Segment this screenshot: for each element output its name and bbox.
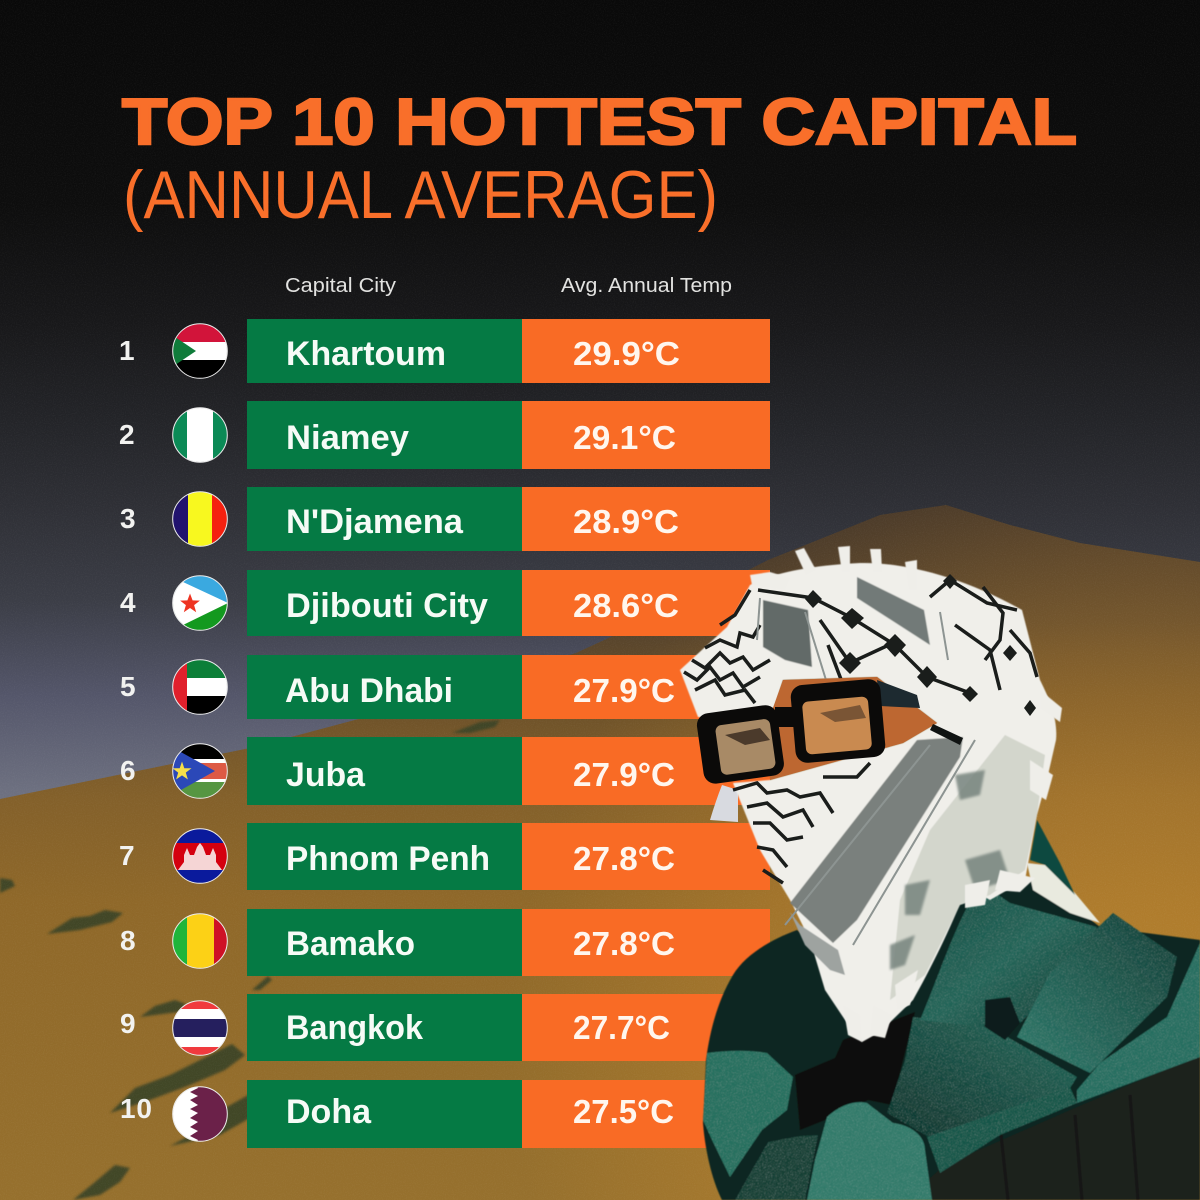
row 2: Niamey: 2 — [119, 419, 135, 450]
column headers — [285, 275, 732, 297]
title: (ANNUAL AVERAGE) — [123, 157, 718, 233]
row 10: Doha: Doha — [286, 1093, 372, 1131]
fringe tassels — [750, 546, 1062, 1042]
tassel left — [710, 785, 738, 822]
row 7: Phnom Penh — [119, 823, 770, 890]
row 9: Bangkok: 9 — [120, 1008, 136, 1039]
row 5: Abu Dhabi: 27.9°C — [573, 672, 675, 709]
keffiyeh pattern — [684, 580, 1037, 883]
row 10: Doha: 27.5°C — [573, 1093, 674, 1130]
row 5: Abu Dhabi: Abu Dhabi — [285, 672, 453, 710]
row 6: Juba: Juba — [286, 756, 366, 794]
row 6: Juba — [120, 737, 770, 805]
row 2: Niamey: Niamey — [286, 419, 409, 457]
row 9: Bangkok — [120, 994, 770, 1061]
row 4: Djibouti City: Djibouti City — [286, 587, 488, 625]
row 6: Juba: 6 — [120, 755, 136, 786]
title: TOP 10 HOTTEST CAPITAL — [122, 85, 1077, 158]
row 3: N'Djamena: 3 — [120, 503, 136, 534]
face skin — [765, 677, 937, 780]
row 10: Doha: 10 — [120, 1093, 152, 1124]
row 8: Bamako — [120, 909, 770, 976]
row 8: Bamako: 8 — [120, 925, 136, 956]
row 3: N'Djamena: 28.9°C — [573, 503, 679, 540]
row 2: Niamey: 29.1°C — [573, 419, 676, 456]
title — [122, 85, 1077, 233]
glasses — [695, 678, 963, 785]
row 4: Djibouti City: 28.6°C — [573, 587, 679, 624]
row 1: Khartoum: 1 — [119, 335, 135, 366]
row 4: Djibouti City: 4 — [120, 587, 136, 618]
keffiyeh scarf — [680, 563, 1056, 1042]
row 5: Abu Dhabi: 5 — [120, 671, 136, 702]
row 10: Doha — [120, 1080, 770, 1148]
row 4: Djibouti City — [120, 570, 770, 636]
row 7: Phnom Penh: Phnom Penh — [286, 840, 490, 878]
row 9: Bangkok: Bangkok — [286, 1009, 423, 1047]
row 6: Juba: 27.9°C — [573, 756, 675, 793]
row 8: Bamako: 27.8°C — [573, 925, 675, 962]
column headers: Capital City — [285, 275, 396, 297]
row 2: Niamey — [119, 401, 770, 469]
row 1: Khartoum — [119, 319, 770, 383]
row 9: Bangkok: 27.7°C — [573, 1009, 670, 1046]
row 7: Phnom Penh: 7 — [119, 840, 135, 871]
row 8: Bamako: Bamako — [286, 925, 415, 963]
column headers: Avg. Annual Temp — [561, 275, 732, 297]
jacket — [703, 820, 1200, 1200]
row 5: Abu Dhabi — [120, 655, 700, 719]
row 3: N'Djamena: N'Djamena — [286, 503, 464, 541]
row 7: Phnom Penh: 27.8°C — [573, 840, 675, 877]
person in keffiyeh and green jacket — [680, 546, 1200, 1200]
row 3: N'Djamena — [120, 487, 770, 551]
row 1: Khartoum: Khartoum — [286, 335, 446, 373]
row 1: Khartoum: 29.9°C — [573, 335, 680, 372]
